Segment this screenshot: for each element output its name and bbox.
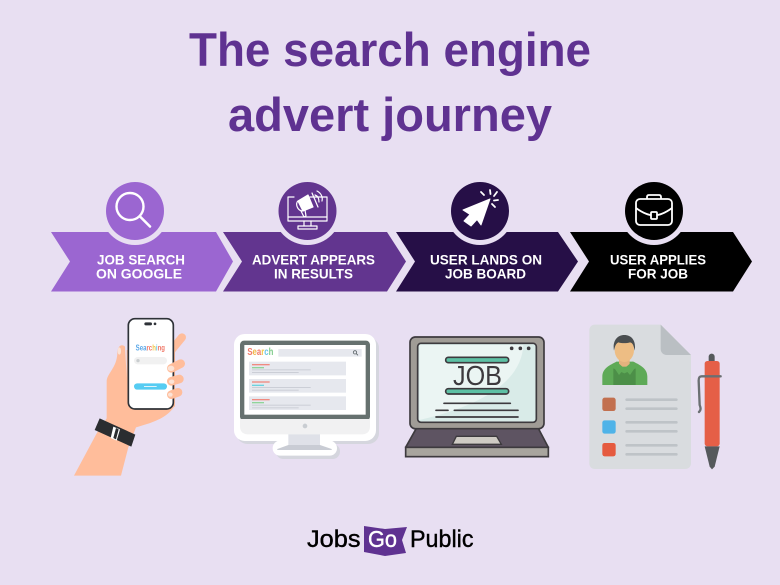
step 2: advert appears in results xyxy=(223,177,406,292)
arrow: step 1 xyxy=(51,232,233,292)
label: step 2 xyxy=(252,252,375,282)
arrow: step 2 xyxy=(223,232,406,292)
monitor shadow xyxy=(237,337,379,459)
monitor body xyxy=(234,334,376,456)
laptop lid xyxy=(410,337,544,429)
step 3: user lands on job board xyxy=(396,177,578,292)
illustration: hand holding phone xyxy=(74,319,182,476)
arrow: step 3 xyxy=(396,232,578,292)
icon: briefcase xyxy=(625,182,683,240)
title xyxy=(189,23,591,141)
pen xyxy=(699,354,721,469)
step 4: user applies for job xyxy=(570,177,752,292)
phone: Searching xyxy=(136,343,165,352)
label: step 1 xyxy=(96,252,185,282)
icon: magnifying glass xyxy=(106,182,164,240)
label: step 3: USER LANDS ON xyxy=(430,252,542,268)
label: step 3: JOB BOARD xyxy=(445,266,526,282)
job headline: JOB xyxy=(453,360,502,391)
label: step 3 xyxy=(430,252,542,282)
title: The search engine xyxy=(189,23,591,76)
logo: jobsgopublic: Public xyxy=(410,526,474,553)
logo: jobsgopublic: Jobs xyxy=(307,526,360,553)
list bullets xyxy=(602,398,616,456)
illustration: cv document and pen xyxy=(589,325,721,469)
hand and forearm xyxy=(74,337,182,476)
phone xyxy=(128,319,173,409)
icon: monitor with megaphone xyxy=(278,182,336,240)
list lines xyxy=(627,400,676,454)
label: step 1: JOB SEARCH xyxy=(97,252,185,268)
title: advert journey xyxy=(228,88,552,141)
logo: jobsgopublic: Go xyxy=(368,526,397,552)
text lines xyxy=(436,403,518,417)
search logo and bar: Search xyxy=(247,347,273,358)
label: step 2: IN RESULTS xyxy=(274,266,353,282)
laptop base xyxy=(406,428,548,447)
window dots xyxy=(510,346,530,350)
label: step 4 xyxy=(610,252,706,282)
document xyxy=(589,325,691,469)
illustration: desktop monitor with search results xyxy=(234,334,379,459)
illustration: laptop with job advert xyxy=(406,337,548,457)
wristwatch xyxy=(95,418,135,447)
icon: cursor click xyxy=(451,182,509,240)
step 1: job search on google xyxy=(51,177,233,292)
arrow: step 4 xyxy=(570,232,752,292)
label: step 4: USER APPLIES xyxy=(610,252,706,268)
label: step 4: FOR JOB xyxy=(628,266,688,282)
profile photo xyxy=(602,335,647,385)
label: step 2: ADVERT APPEARS xyxy=(252,252,375,268)
label: step 1: ON GOOGLE xyxy=(96,266,182,282)
result rows xyxy=(249,362,346,410)
logo: jobsgopublic xyxy=(307,526,474,556)
logo flag xyxy=(364,526,407,556)
fingers over phone xyxy=(118,347,181,397)
